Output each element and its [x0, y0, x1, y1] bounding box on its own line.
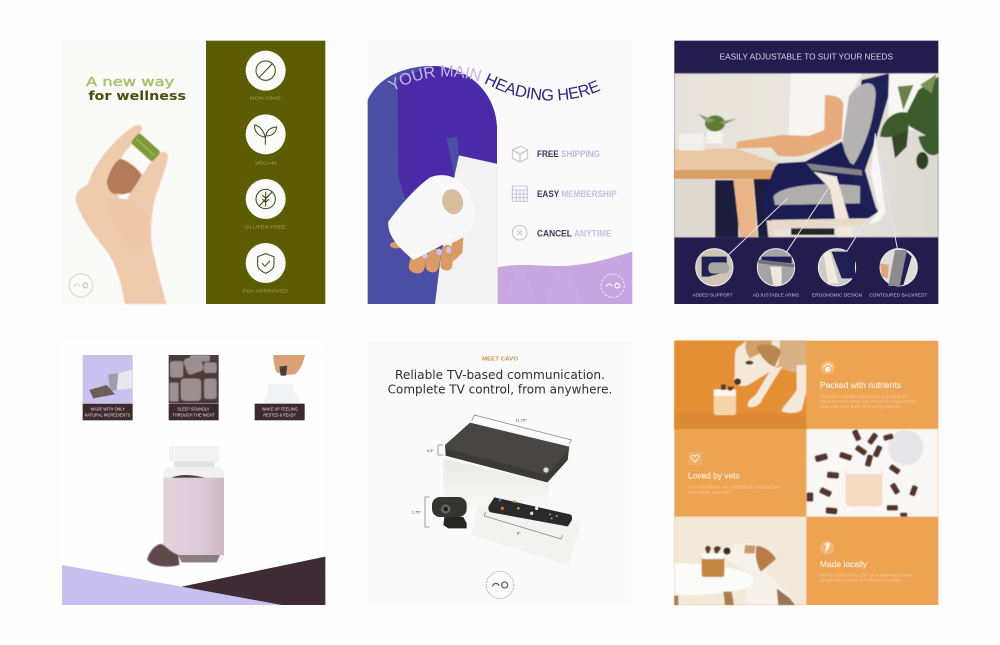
tile: sleep soundly — [169, 354, 219, 420]
badge: gluten free: GLUTEN FREE — [245, 225, 286, 230]
tile: natural ingredients: MADE WITH ONLY — [91, 407, 125, 412]
hand under roll — [390, 237, 463, 275]
panel: a new way for wellness — [62, 40, 325, 304]
block: made locally: We're made in the USA by a National Animal — [820, 572, 913, 577]
dimension: height — [427, 445, 443, 455]
logo mark — [69, 274, 93, 297]
white pedestals — [443, 458, 582, 566]
purple sleeve — [398, 66, 497, 198]
dimension: width — [472, 415, 572, 444]
feature: easy membership: EASY MEMBERSHIP — [537, 189, 617, 199]
detail: contoured backrest — [869, 249, 927, 299]
feature: cancel anytime — [512, 225, 612, 240]
dimension: remote length — [484, 512, 563, 539]
badge: vegan: VEGAN — [255, 160, 276, 165]
block: packed with nutrients — [820, 361, 917, 409]
feature: easy membership — [512, 186, 617, 201]
detail: added support: ADDED SUPPORT — [692, 293, 733, 299]
block: loved by vets: Loved by vets — [688, 472, 740, 481]
gummy jar — [147, 446, 224, 567]
eyebrow: MEET CAVO — [482, 357, 519, 363]
toilet roll — [388, 175, 475, 260]
block: made locally: Made locally — [820, 560, 867, 569]
tile: sleep soundly: SLEEP SOUNDLY — [177, 407, 210, 412]
heading: Reliable TV-based communication. — [395, 368, 605, 382]
photo: dog and table — [674, 517, 806, 605]
panel: easily adjustable chair — [674, 41, 938, 304]
block: loved by vets — [688, 452, 781, 495]
block: packed with nutrients: You'll be confident your dog is getting the — [820, 394, 909, 399]
office photo — [674, 73, 938, 237]
curved heading: YOUR MAIN HEADING HERE — [387, 65, 600, 101]
panel: your main heading here — [368, 65, 632, 304]
block: packed with nutrients: Packed with nutrients — [820, 381, 901, 390]
block: loved by vets: veterinarian approved — [688, 490, 730, 495]
title: EASILY ADJUSTABLE TO SUIT YOUR NEEDS — [720, 53, 893, 62]
tv device — [445, 423, 569, 482]
detail: ergonomic design — [812, 249, 863, 299]
heading: a new way for wellness: for wellness — [88, 88, 186, 103]
tile: natural ingredients — [83, 355, 133, 420]
heading — [388, 368, 612, 397]
block: made locally — [820, 541, 913, 582]
logo mark — [601, 274, 624, 297]
white trousers — [435, 155, 498, 304]
dimension: height: 0.5" — [427, 448, 434, 453]
photo: dog sniffing jar — [674, 341, 806, 429]
tile: wake up rested: WAKE UP FEELING — [262, 407, 298, 412]
photo: scattered bone treats — [806, 429, 938, 517]
remote control — [488, 497, 572, 526]
badge: vegan — [246, 114, 286, 165]
logo mark — [486, 571, 514, 599]
tile: natural ingredients: NATURAL INGREDIENTS — [85, 412, 131, 417]
detail: adjustable arms — [753, 249, 800, 299]
feature: free shipping: FREE SHIPPING — [537, 149, 600, 159]
lilac wave — [498, 252, 632, 304]
feature: free shipping — [512, 146, 600, 162]
badge: fda approved: FDA APPROVED — [243, 289, 289, 294]
detail: added support — [692, 249, 733, 299]
block: loved by vets: Our ingredients are scientifically studied and — [688, 484, 781, 489]
block: packed with nutrients: ever with their burst of healthy vitamins — [820, 404, 902, 409]
panel: meet cavo — [368, 342, 632, 605]
detail: contoured backrest: CONTOURED BACKREST — [869, 293, 927, 299]
feature: cancel anytime: CANCEL ANYTIME — [537, 228, 612, 238]
badge: fda approved — [243, 243, 289, 294]
roll hole — [439, 187, 466, 217]
dimension: webcam height — [412, 497, 430, 527]
bottom colour wedges — [62, 557, 325, 605]
detail: adjustable arms: ADJUSTABLE ARMS — [753, 293, 800, 299]
dimension: width: 11.75" — [515, 417, 527, 422]
tile: wake up rested — [255, 355, 305, 420]
tile: wake up rested: RESTED & READY — [263, 412, 296, 417]
dimension: remote length: 9" — [517, 531, 521, 536]
badge: gluten free — [245, 179, 286, 230]
detail: ergonomic design: ERGONOMIC DESIGN — [812, 293, 863, 299]
badge: non-gmo — [246, 51, 286, 100]
dimension: webcam height: 1.75" — [412, 510, 422, 515]
heading: a new way for wellness — [86, 74, 186, 103]
webcam — [432, 497, 467, 528]
blue arch — [368, 66, 497, 304]
hand holding capsules — [76, 125, 168, 304]
heading: Complete TV control, from anywhere. — [388, 383, 612, 397]
heading: a new way for wellness: A new way — [86, 74, 175, 89]
tile: sleep soundly: THROUGH THE NIGHT — [172, 412, 215, 417]
block: made locally: Supplement Council Preferred Supplier — [820, 577, 902, 582]
panel: dog supplements — [674, 341, 938, 605]
badge: non-gmo: NON-GMO — [250, 95, 281, 100]
panel: gummies jar — [62, 342, 325, 605]
finger nails — [422, 247, 451, 259]
block: packed with nutrients: nutrients they need, and they'll be happier than — [820, 399, 917, 404]
pointer lines — [728, 133, 897, 255]
